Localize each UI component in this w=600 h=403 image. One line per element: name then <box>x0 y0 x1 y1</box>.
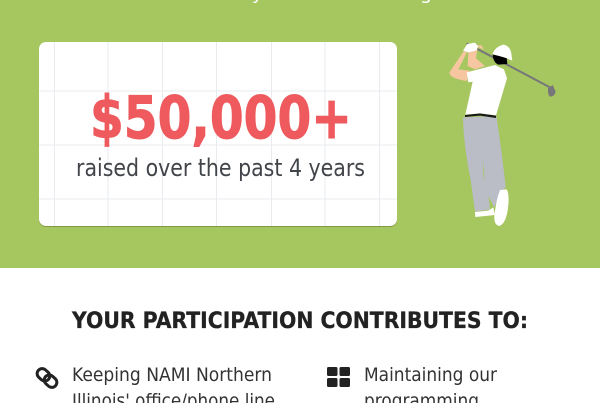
caption: raised over the past 4 years <box>76 154 365 182</box>
shoes <box>475 207 495 217</box>
icon: four-square grid <box>327 367 350 387</box>
shirt <box>465 65 507 115</box>
cap <box>492 45 512 61</box>
icon: chain link <box>35 367 59 389</box>
green banner <box>0 0 600 268</box>
golf club <box>467 43 550 87</box>
list item: office and phone line <box>72 364 275 403</box>
list item: programming: Maintaining our <box>364 364 497 386</box>
hair and neck <box>493 55 507 65</box>
glove <box>463 43 478 52</box>
belt <box>465 113 496 118</box>
trousers <box>463 116 506 212</box>
icon: golfer illustration <box>449 43 556 226</box>
list item: programming <box>364 364 497 403</box>
amount: $50,000+ <box>90 83 352 152</box>
list item: office and phone line: Keeping NAMI Northern <box>72 364 272 386</box>
arms <box>449 52 469 81</box>
clipped heading descenders <box>252 0 432 4</box>
panel: fundraising total card <box>39 42 397 227</box>
heading: YOUR PARTICIPATION CONTRIBUTES TO: <box>71 308 528 334</box>
